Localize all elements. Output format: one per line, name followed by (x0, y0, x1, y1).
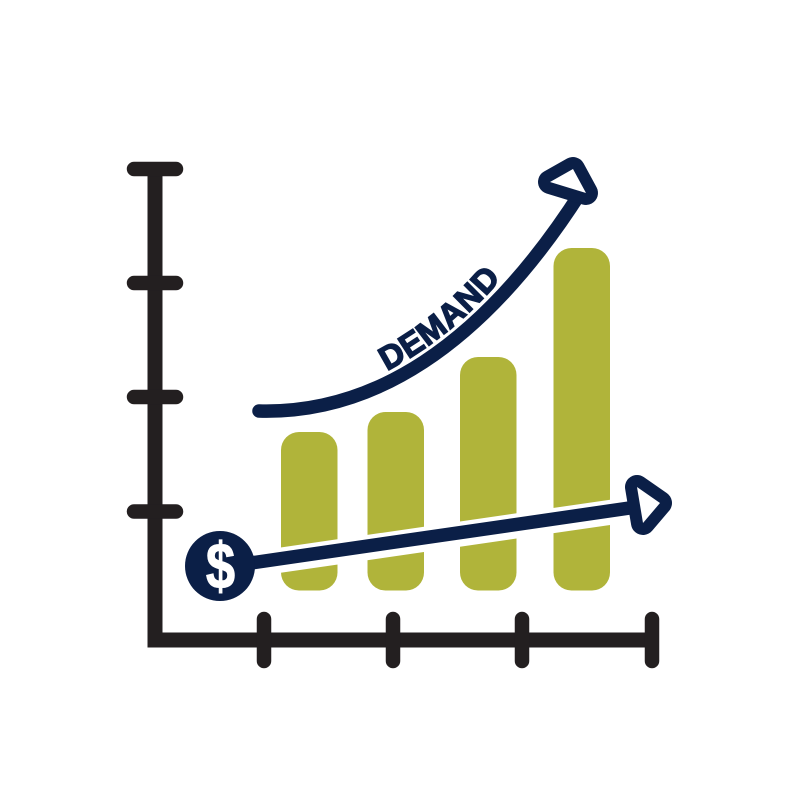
icon: dollar coin (185, 530, 255, 602)
price trend arrow (185, 487, 660, 602)
axes with tick marks (134, 169, 652, 661)
icon: dollar coin: $ (206, 530, 235, 602)
demand curve arrow (259, 169, 586, 411)
demand label: DEMAND (376, 268, 497, 371)
bars (281, 248, 610, 590)
